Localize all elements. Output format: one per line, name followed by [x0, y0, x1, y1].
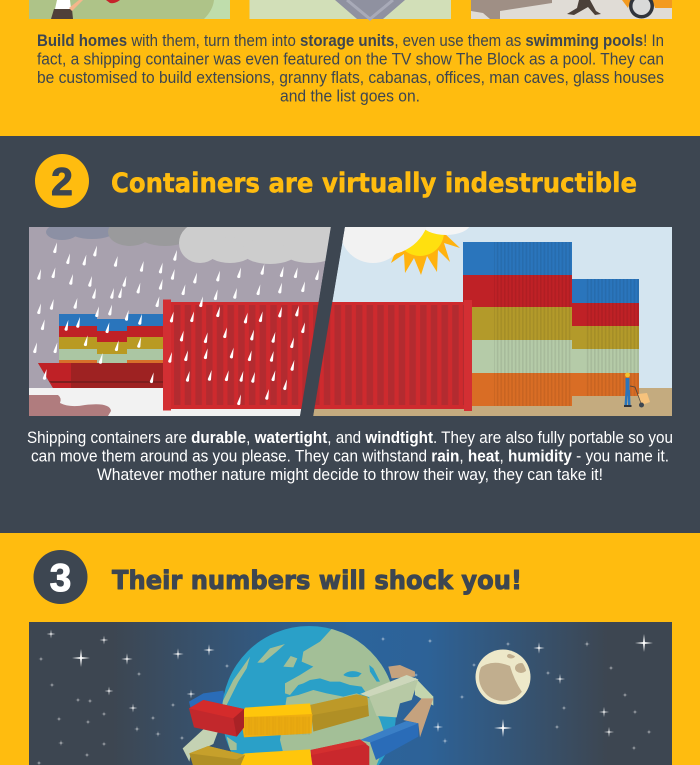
text: section 2 description: [27, 429, 673, 484]
container ring: pale green and tan: [183, 675, 433, 762]
image: container roof: [250, 0, 451, 19]
storm scene: [29, 216, 338, 416]
globe: [222, 626, 396, 765]
illustration: containers orbiting the globe: [29, 622, 672, 765]
sunny scene: [313, 227, 672, 416]
container ring: olive upper: [310, 694, 369, 732]
image: container moving scene: [471, 0, 672, 19]
number badge 2: [35, 154, 89, 208]
moon: [476, 650, 530, 704]
container ring: red upper: [189, 700, 244, 737]
globe and containers: [183, 623, 433, 765]
diagonal divider: [300, 226, 345, 417]
tall container stack: [463, 242, 572, 406]
stars: [36, 630, 653, 765]
text: section 1 description: and the list goes on.: [280, 88, 420, 106]
container ring: olive lower: [189, 746, 245, 765]
image: woman beside garden: [29, 0, 230, 19]
number badge 3: 3: [50, 557, 71, 600]
section 1 background: [0, 0, 700, 136]
worker with hand truck: [624, 373, 650, 408]
heading: containers are virtually indestructible: Containers are virtually indestructible: [111, 168, 637, 199]
container ring: blue lower right: [360, 721, 418, 760]
section 3 background: [0, 533, 700, 765]
text: section 2 description: Shipping containers are durable, watertight, and windtight. They are also fully portable so you: [27, 429, 673, 447]
container ring: red lower: [311, 739, 369, 765]
text: section 1 description: Build homes with them, turn them into storage units, even use them as swimming pools! In: [37, 32, 664, 50]
text: section 1 description: [37, 32, 664, 106]
number badge 2: 2: [51, 161, 73, 204]
text: section 2 description: can move them around as you please. They can withstand rain, heat, humidity - you name it.: [31, 448, 669, 466]
back containers: [189, 665, 415, 708]
space background: [29, 622, 672, 765]
heading: their numbers will shock you: Their numbers will shock you!: [112, 566, 522, 596]
text: section 1 description: fact, a shipping container was even featured on the TV show The Block as a pool. They can: [37, 50, 664, 68]
section 2 background: [0, 136, 700, 533]
number badge 3: [34, 550, 88, 604]
container ring: yellow lower: [241, 749, 313, 765]
text: section 1 description: be customised to build extensions, granny flats, cabanas, offices, man caves, glass houses: [37, 69, 664, 87]
text: section 2 description: Whatever mother nature might decide to throw their way, they can take it!: [97, 466, 603, 484]
container ring: yellow upper: [241, 703, 312, 737]
rain drops: [33, 242, 319, 405]
illustration: storm versus sun: [29, 227, 672, 416]
ship with containers: [38, 314, 163, 388]
short container stack: [572, 279, 639, 396]
red container: [163, 300, 472, 411]
